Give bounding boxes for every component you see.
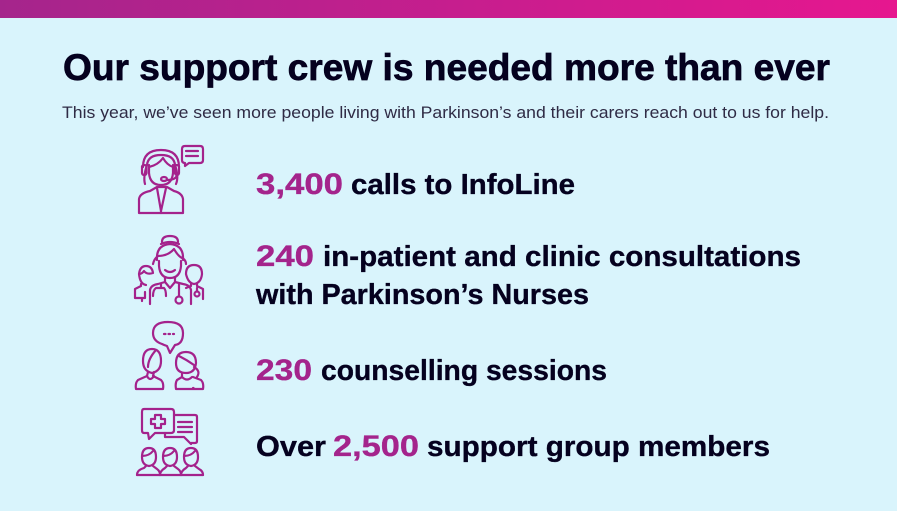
stat: support group members: Over	[256, 431, 326, 463]
title: Our support crew is needed more than ever	[63, 47, 830, 88]
stat: support group members	[256, 430, 770, 463]
stat: nurse consultations: with Parkinson’s Nurses	[255, 279, 589, 311]
stat: calls to InfoLine	[256, 168, 575, 201]
stat: nurse consultations: in-patient and clinic consultations	[323, 241, 801, 273]
stat: support group members: support group members	[427, 431, 770, 463]
stat: support group members: 2,500	[333, 430, 419, 463]
stat: nurse consultations	[255, 240, 801, 311]
stat: calls to InfoLine: 3,400	[256, 168, 343, 201]
icon: support group	[137, 409, 203, 475]
subtitle: This year, we’ve seen more people living with Parkinson’s and their carers reach out to us for help.	[62, 103, 829, 122]
stat: calls to InfoLine: calls to InfoLine	[351, 169, 575, 201]
icon: nurse with patients	[135, 236, 203, 304]
stat: counselling sessions: counselling sessions	[321, 355, 607, 387]
top gradient bar	[0, 0, 897, 18]
icon: call handler with headset	[139, 146, 203, 213]
stat: counselling sessions: 230	[256, 354, 312, 387]
stat: nurse consultations: 240	[256, 240, 314, 273]
icon: counselling conversation	[136, 322, 203, 389]
